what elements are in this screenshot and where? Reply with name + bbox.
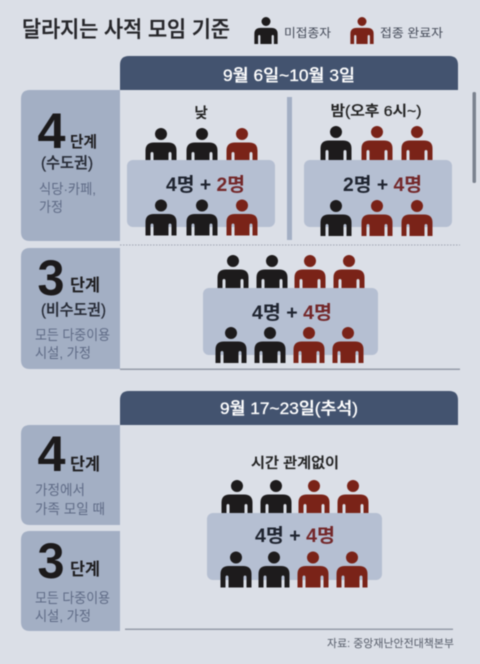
source: 자료: 중앙재난안전대책본부 xyxy=(327,637,454,650)
panel: level 4 family: 4 xyxy=(38,426,66,482)
table xyxy=(127,160,275,227)
panel: level 4 metropolitan: 가정 xyxy=(39,199,63,215)
people bottom row xyxy=(216,327,364,363)
people top row xyxy=(146,128,258,164)
panel: level 3 non-metropolitan: 단계 xyxy=(70,276,100,295)
table xyxy=(304,160,452,227)
level 3 group xyxy=(203,255,378,363)
heading: regardless of time: 시간 관계없이 xyxy=(251,455,339,472)
count label: 4명 + 2명 xyxy=(166,174,245,196)
legend xyxy=(254,17,443,44)
period header: Chuseok: 9월 17~23일(추석) xyxy=(220,399,358,418)
side bar xyxy=(472,92,476,183)
people top row xyxy=(218,255,364,291)
heading: day: 낮 xyxy=(194,105,208,122)
people top row xyxy=(222,480,368,516)
count label: 4명 + 4명 xyxy=(252,302,332,324)
period header: Sep 6 to Oct 3 xyxy=(120,56,458,90)
heading: night: 밤(오후 6시~) xyxy=(330,103,422,120)
panel: level 4 metropolitan: 식당·카페, xyxy=(39,181,96,197)
panel: level 3 facilities: 모든 다중이용 xyxy=(35,590,110,606)
table xyxy=(207,513,382,580)
dotted divider xyxy=(120,244,460,246)
panel: level 3 facilities: 3 xyxy=(38,533,64,589)
panel: level 4 metropolitan: 단계 xyxy=(70,133,97,151)
panel: level 4 metropolitan xyxy=(21,90,120,241)
period header: Chuseok xyxy=(120,391,458,425)
people bottom row xyxy=(146,200,258,236)
divider day night xyxy=(287,97,292,240)
panel: level 4 family: 가정에서 xyxy=(35,482,85,498)
icon: unvaccinated person xyxy=(254,17,278,44)
panel: level 4 family: 단계 xyxy=(70,455,100,474)
panel: level 3 non-metropolitan: 시설, 가정 xyxy=(35,345,91,361)
table xyxy=(203,288,378,355)
section rule xyxy=(120,368,460,370)
panel: level 3 non-metropolitan: (비수도권) xyxy=(41,301,106,319)
nighttime group xyxy=(304,103,452,236)
daytime group xyxy=(127,105,275,236)
panel: level 3 non-metropolitan: 3 xyxy=(38,250,64,306)
people top row xyxy=(320,126,432,162)
panel: level 4 family xyxy=(21,425,120,525)
people bottom row xyxy=(320,200,432,236)
panel: level 3 facilities: 단계 xyxy=(70,560,100,579)
legend label: unvaccinated: 미접종자 xyxy=(284,26,331,40)
panel: level 4 metropolitan: (수도권) xyxy=(41,154,93,172)
panel: level 3 non-metropolitan xyxy=(21,248,120,369)
legend label: vaccinated: 접종 완료자 xyxy=(380,26,443,40)
people bottom row xyxy=(220,552,368,588)
Chuseok group xyxy=(207,455,382,588)
panel: level 4 family: 가족 모일 때 xyxy=(35,501,105,517)
title: 달라지는 사적 모임 기준 xyxy=(22,17,230,42)
count label: 2명 + 4명 xyxy=(343,174,422,196)
bottom rule xyxy=(125,628,453,630)
panel: level 3 facilities xyxy=(21,531,120,631)
icon: vaccinated person xyxy=(350,17,374,44)
count label: 4명 + 4명 xyxy=(255,525,335,547)
panel: level 3 facilities: 시설, 가정 xyxy=(35,608,91,624)
panel: level 3 non-metropolitan: 모든 다중이용 xyxy=(35,327,110,343)
panel: level 4 metropolitan: 4 xyxy=(38,103,66,159)
period header: Sep 6 to Oct 3: 9월 6일~10월 3일 xyxy=(223,66,355,85)
